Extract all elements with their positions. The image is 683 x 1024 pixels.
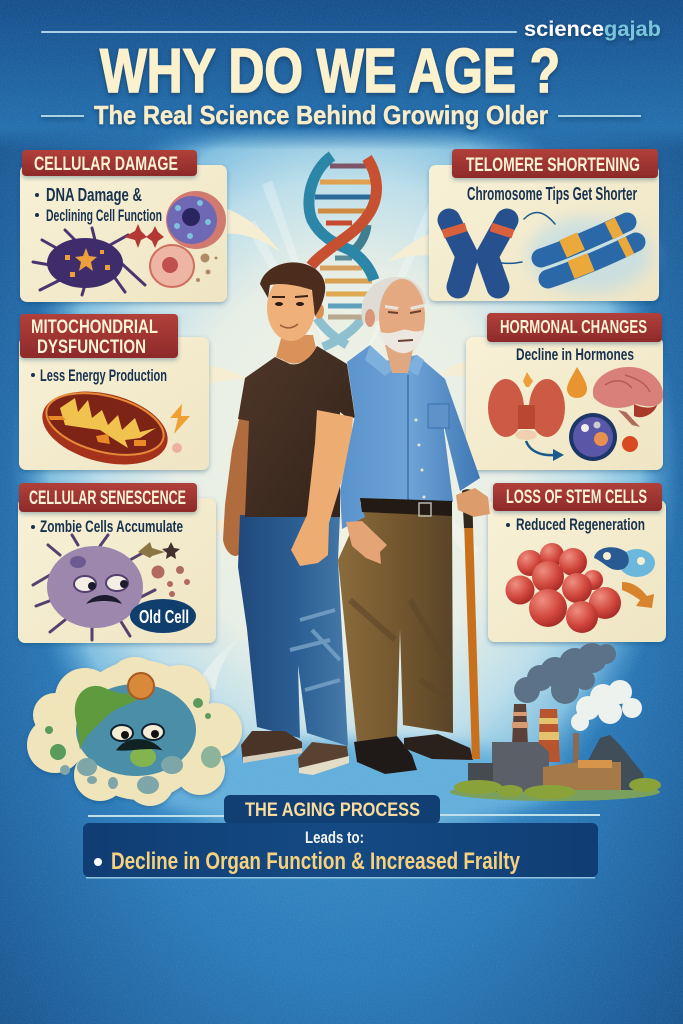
hair <box>260 262 325 316</box>
text: Zombie Cells Accumulate <box>40 517 183 536</box>
heading <box>20 314 178 358</box>
text: Less Energy Production <box>40 366 167 385</box>
icon: brain <box>593 367 663 427</box>
icon: shortened chromosomes <box>497 213 636 279</box>
mountain <box>585 735 644 790</box>
neck <box>276 335 316 364</box>
factory <box>450 643 661 801</box>
subtitle: The Real Science Behind Growing Older <box>94 100 548 130</box>
cloud <box>27 657 242 806</box>
heading: MITOCHONDRIAL <box>31 317 158 338</box>
icon: hormone drop <box>567 367 587 398</box>
text: leads to: Leads to: <box>305 828 364 847</box>
left arm <box>223 415 252 556</box>
panel: cellular senescence <box>18 483 236 643</box>
logo: sciencegajab: sciencegajab <box>524 18 661 41</box>
icon: old senescent cell <box>33 535 155 640</box>
icon: energy sparks <box>170 404 190 434</box>
planet <box>76 684 196 776</box>
panel: loss of stem cells <box>488 483 666 642</box>
callout: old cell <box>130 599 196 633</box>
panel: conclusion <box>83 823 598 878</box>
icon: small orange ball <box>622 436 638 452</box>
icon: red stem cells <box>506 543 621 633</box>
shirt <box>340 345 480 529</box>
thought bubble: aging earth <box>27 638 242 806</box>
icon: hormone sphere <box>569 413 617 461</box>
top rule <box>41 31 517 33</box>
text <box>31 366 167 385</box>
panel: cellular damage <box>20 150 280 302</box>
heading <box>19 483 197 512</box>
title: WHY DO WE AGE ? <box>100 37 560 106</box>
cane <box>463 491 480 759</box>
right arm <box>291 410 353 566</box>
panel: telomere shortening <box>388 149 659 301</box>
trousers <box>338 505 453 743</box>
icon: thyroid <box>488 372 565 461</box>
eyes <box>388 311 421 341</box>
speech pointer <box>198 638 240 690</box>
belt <box>360 498 452 516</box>
icon: damaged cell <box>33 228 145 295</box>
ground <box>450 783 660 801</box>
shoes <box>241 731 302 762</box>
tan building <box>543 762 621 790</box>
icon: pink cell <box>150 245 218 287</box>
panel: hormonal changes <box>440 313 663 470</box>
heading <box>22 150 197 176</box>
shoes <box>354 736 417 774</box>
icon: X chromosome <box>443 220 513 287</box>
speech pointer <box>205 366 250 386</box>
heading <box>493 483 662 511</box>
banner: the aging process: THE AGING PROCESS <box>245 800 420 821</box>
text: DNA Damage & <box>46 185 142 205</box>
speech pointer <box>490 548 507 572</box>
speech pointer <box>208 518 236 540</box>
text <box>35 185 162 225</box>
icon: mitochondrion <box>35 380 175 476</box>
jeans <box>238 515 348 746</box>
callout: old cell: Old Cell <box>139 607 189 627</box>
head <box>267 275 315 341</box>
text: Decline in Hormones <box>516 345 634 364</box>
grey building <box>492 742 549 792</box>
speech pointer <box>388 232 432 262</box>
figure: young man <box>223 262 355 775</box>
banner: the aging process <box>224 795 440 824</box>
chimneys <box>512 704 528 745</box>
left hand <box>346 521 387 564</box>
text <box>31 517 183 536</box>
bullet text: Decline in Organ Function & Increased Frailty <box>111 848 521 875</box>
t-shirt <box>238 346 355 517</box>
heading: DYSFUNCTION <box>37 337 146 358</box>
shrubs <box>454 778 661 799</box>
eyes and mouth <box>275 302 304 306</box>
bottom rules <box>88 814 600 817</box>
figure: old man <box>338 277 490 774</box>
face <box>111 725 133 741</box>
text: Declining Cell Function <box>46 206 162 225</box>
heading <box>452 149 658 178</box>
snail shell <box>128 673 154 699</box>
heading: CELLULAR DAMAGE <box>34 154 178 175</box>
right hand on cane <box>456 488 490 517</box>
speech pointer <box>440 362 470 380</box>
panel: mitochondrial dysfunction <box>19 314 250 476</box>
icon: red sparks <box>124 224 164 248</box>
heading <box>487 313 662 342</box>
smoke <box>514 643 616 704</box>
icon: blue cells <box>594 547 655 577</box>
icon: fading marks <box>138 542 190 597</box>
head <box>379 279 425 355</box>
beard <box>378 330 423 353</box>
rocks <box>60 746 221 794</box>
speech pointer <box>222 207 280 252</box>
icon: orange arrow <box>622 582 654 608</box>
icon: purple cell <box>166 191 226 249</box>
heading: CELLULAR SENESCENCE <box>29 488 186 509</box>
DNA helix <box>309 156 376 347</box>
white hair <box>361 277 426 324</box>
neck <box>385 345 414 373</box>
